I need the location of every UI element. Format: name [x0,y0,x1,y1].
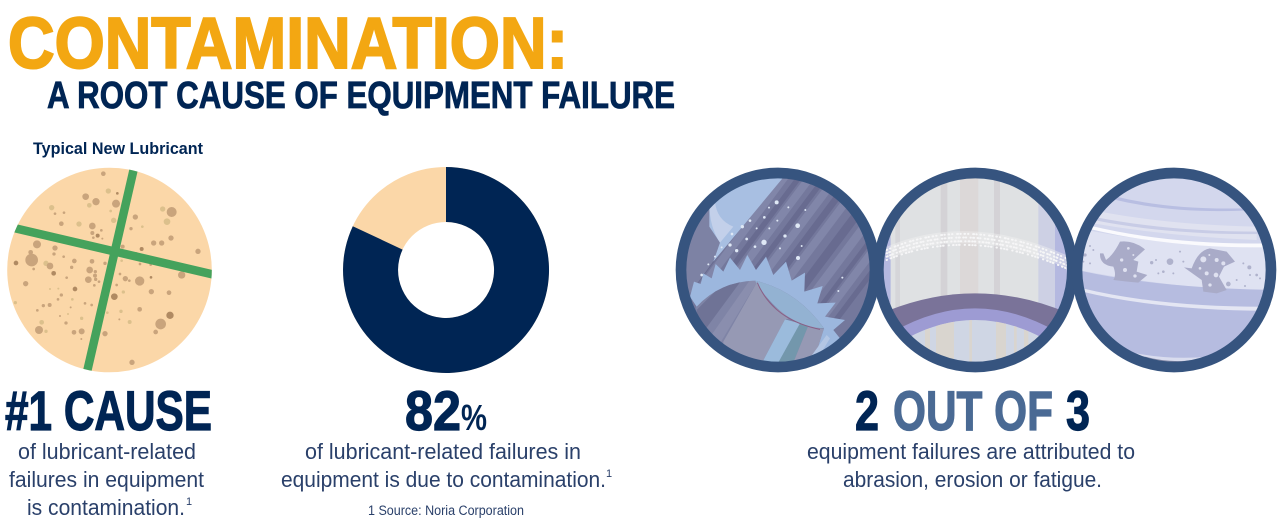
text: 82 percent description: equipment is due to contamination. [281,467,606,492]
title: CONTAMINATION: [8,4,568,84]
donut chart [343,167,549,373]
panel: number one cause [5,139,214,520]
text: cause description: of lubricant-related [18,439,196,464]
text: cause description: 1 [186,496,192,508]
heading: typical new lubricant: Typical New Lubricant [33,139,203,158]
panel: equipment failures [676,168,1276,492]
stat: 82 percent: 82 [405,379,461,442]
text: failures description [807,439,1135,492]
stat: 2 out of 3: 3 [1066,379,1090,442]
panel: 82 percent [281,167,612,518]
stat: 2 out of 3: 2 [855,379,879,442]
icon: worn gear [676,168,877,372]
text: 82 percent description [281,439,612,492]
stat: 2 out of 3: OUT OF [893,379,1053,442]
text: 82 percent description: 1 [606,468,612,480]
text: failures description: abrasion, erosion or fatigue. [843,467,1102,492]
text: cause description: is contamination. [27,495,185,520]
icon: lubricant sample with particles [7,168,214,372]
text: failures description: equipment failures are attributed to [807,439,1135,464]
icon: fatigued bearing [1074,168,1276,372]
stat: 82 percent: % [461,397,487,438]
text: cause description [9,439,204,520]
source note: 1 Source: Noria Corporation [368,503,524,518]
stat: number one cause: #1 CAUSE [5,379,212,442]
text: 82 percent description: of lubricant-related failures in [305,439,581,464]
icon: abraded shaft [876,168,1075,372]
subtitle: A ROOT CAUSE OF EQUIPMENT FAILURE [47,75,675,117]
text: cause description: failures in equipment [9,467,204,492]
